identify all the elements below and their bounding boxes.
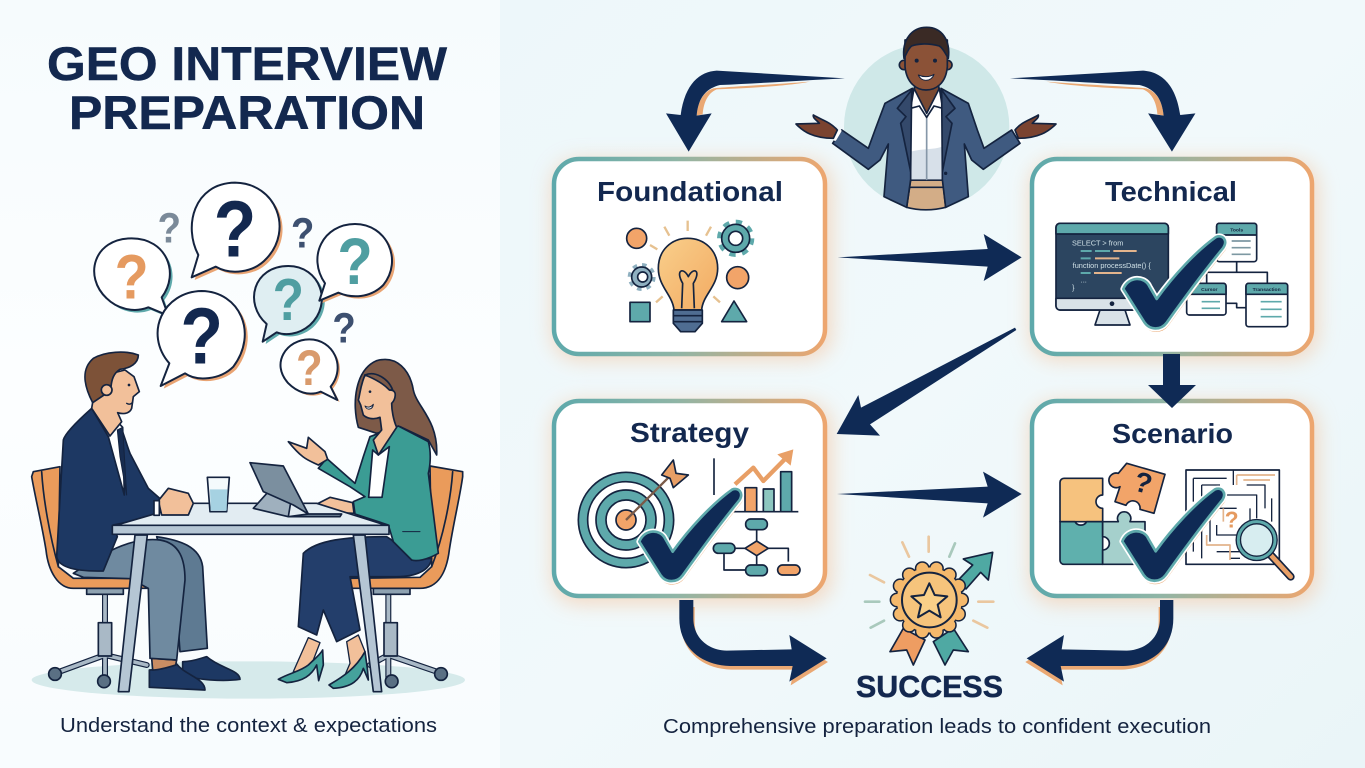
- floor shadow: [32, 661, 465, 699]
- panel: right background: [500, 0, 1365, 768]
- presenter backdrop circle: [844, 44, 1009, 209]
- icon: code monitor with database tables and checkmark: Transaction: [1253, 287, 1281, 293]
- free question marks: ?: [291, 210, 314, 258]
- heading: Scenario: Scenario: [1112, 418, 1233, 449]
- water glass: [207, 477, 229, 512]
- presenter figure: [796, 27, 1056, 210]
- icon: code monitor with database tables and checkmark: [1056, 223, 1288, 330]
- bubble: right teal: [317, 224, 395, 303]
- bubble: center tinted: [254, 266, 325, 344]
- icon: code monitor with database tables and checkmark: Tools: [1230, 227, 1243, 233]
- woman: [278, 359, 438, 688]
- icon: puzzle, maze, magnifier and checkmark: ?: [1225, 507, 1239, 533]
- title: GEO INTERVIEW: [47, 38, 447, 91]
- medal rays: [865, 537, 993, 628]
- label: SUCCESS: SUCCESS: [856, 670, 1003, 704]
- card: Strategy: [552, 401, 832, 604]
- icon: success medal: [865, 537, 993, 665]
- left chair: [32, 467, 150, 688]
- icon: light bulb with gears and shapes: [627, 221, 751, 332]
- icon: code monitor with database tables and checkmark: ...: [1081, 276, 1087, 285]
- icon: code monitor with database tables and checkmark: Cursor: [1201, 287, 1218, 293]
- free question marks: ?: [158, 205, 181, 253]
- icon: puzzle, maze, magnifier and checkmark: [1060, 463, 1291, 583]
- man: [57, 352, 240, 690]
- rosette scallops: [890, 562, 968, 638]
- panel: left background: [0, 0, 500, 768]
- bubble: left orange: ?: [115, 242, 149, 312]
- bubble: right teal: ?: [337, 225, 373, 298]
- heading: Technical: Technical: [1105, 176, 1237, 207]
- arrow: Foundational to Technical: [838, 234, 1022, 281]
- heading: Strategy: Strategy: [630, 417, 749, 448]
- card: Foundational: [552, 159, 832, 360]
- bubble: lower large: ?: [180, 291, 223, 380]
- caption: left: Understand the context & expectations: [60, 715, 437, 737]
- icon: code monitor with database tables and checkmark: function processDate() {: [1073, 261, 1151, 270]
- bubble: top large: ?: [214, 185, 256, 274]
- free question marks: ?: [332, 304, 356, 352]
- icon: target, growth chart, flowchart and checkmark: [578, 449, 800, 583]
- icon: puzzle, maze, magnifier and checkmark: ?: [1131, 466, 1156, 501]
- title: [47, 38, 447, 140]
- heading: Foundational: Foundational: [597, 176, 783, 207]
- speech bubbles with question marks: [94, 183, 395, 402]
- caption: right: Comprehensive preparation leads to confident execution: [663, 716, 1211, 738]
- arrow: Strategy to success: [679, 600, 828, 685]
- bubble: left orange: [94, 238, 173, 318]
- ribbons: [890, 628, 925, 665]
- arrow: Strategy to Scenario: [837, 472, 1022, 518]
- bubble: top large: [192, 183, 283, 280]
- bubble: small orange: ?: [296, 340, 323, 396]
- title: PREPARATION: [69, 87, 425, 140]
- arrow: presenter to Foundational: [666, 71, 845, 152]
- card: Scenario: [1030, 401, 1318, 604]
- bubble: small orange: [280, 339, 340, 402]
- arrow: Scenario to success: [1025, 600, 1173, 685]
- rising arrow: [957, 552, 993, 589]
- icon: code monitor with database tables and checkmark: SELECT > from: [1072, 238, 1123, 247]
- free question marks: [158, 205, 356, 352]
- tablet: [250, 463, 342, 517]
- bubble: lower large: [158, 291, 248, 389]
- arrow: Technical to Scenario: [1148, 354, 1196, 408]
- card: Technical: [1030, 159, 1318, 360]
- icon: code monitor with database tables and checkmark: }: [1072, 283, 1075, 292]
- interview scene illustration: [32, 352, 465, 699]
- table: [112, 488, 389, 692]
- arrow: presenter to Technical: [1010, 71, 1195, 152]
- arrow: Technical to Strategy: [837, 328, 1016, 436]
- bubble: center tinted: ?: [273, 266, 304, 333]
- right chair: [350, 466, 463, 688]
